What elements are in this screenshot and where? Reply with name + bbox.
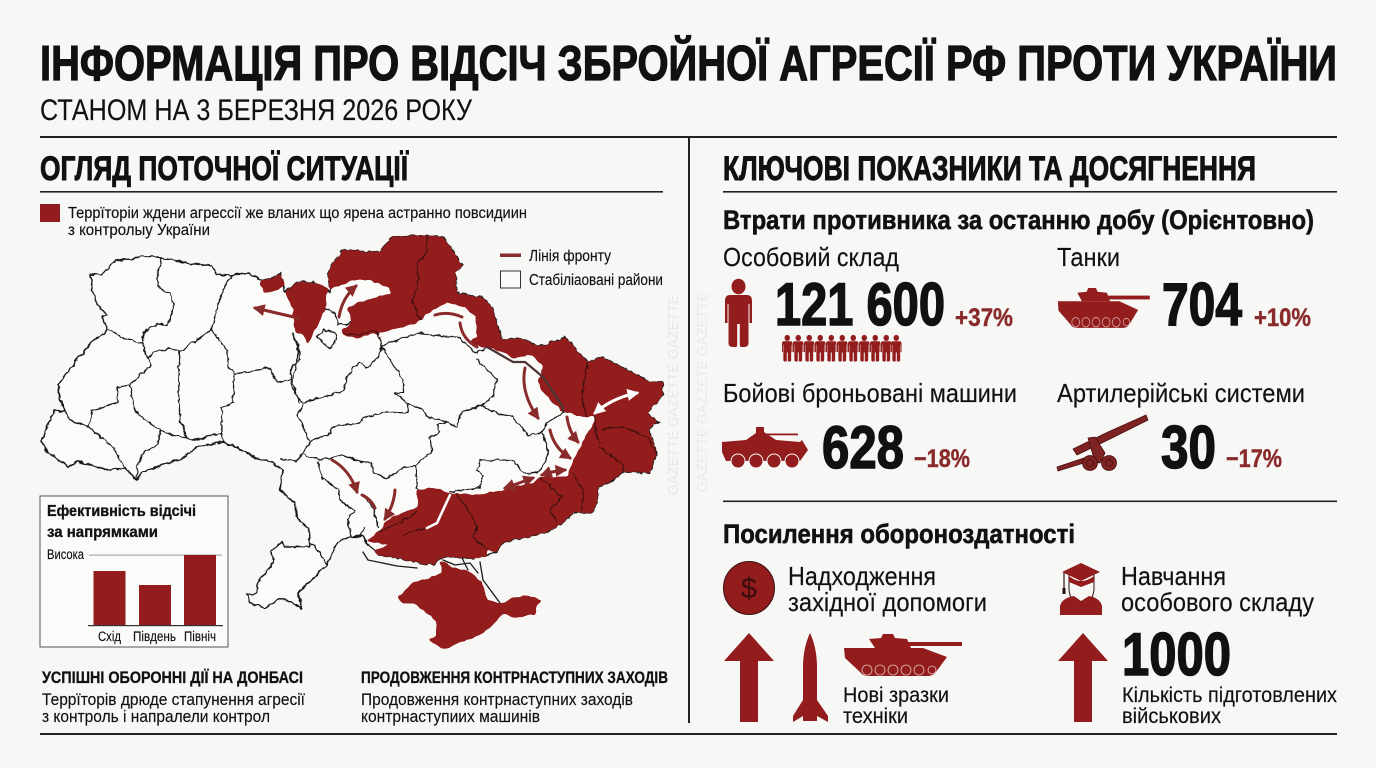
stat: personnel: Особовий склад [723, 242, 899, 272]
arrow: trained personnel up [1058, 633, 1108, 722]
map base outline [42, 235, 663, 608]
map legend: front line: Лінія фронту [529, 248, 611, 265]
front line [487, 347, 563, 412]
stat: artillery: −17% [1226, 445, 1282, 473]
map legend: occupied territory: з контролыу України [68, 222, 210, 239]
text: new equipment: Нові зразки [843, 684, 949, 707]
borders inside occupied territory [343, 237, 657, 550]
icon: tank new equipment [844, 634, 962, 676]
bar chart: repulse effectiveness: Північ [184, 629, 216, 644]
stat: tanks: Танки [1057, 242, 1120, 272]
Dnipro river [427, 495, 450, 528]
item: personnel training: Навчання [1121, 561, 1226, 591]
stat: personnel [723, 242, 1013, 362]
heading: situation overview: ОГЛЯД ПОТОЧНОЇ СИТУАЦІЇ [40, 150, 409, 188]
item: personnel training: особового складу [1121, 587, 1314, 617]
map legend: occupied territory: Террїторіи ждени агрессії же вланих що ярена астранно повсидиин [68, 205, 527, 222]
bar chart: repulse effectiveness: Ефективність відсічі [47, 503, 196, 520]
stat: trained personnel: військових [1122, 705, 1221, 728]
icon: tank [1058, 288, 1150, 328]
heading rule [723, 191, 1337, 193]
item: western aid: Надходження [788, 561, 936, 591]
map legend: stabilized areas [500, 271, 663, 289]
item: western aid: західної допомоги [788, 587, 987, 617]
arrow: white two-way in Luhansk [595, 393, 637, 413]
icon: rocket [793, 633, 828, 722]
item: personnel training [1060, 561, 1314, 617]
icon: armoured vehicle [722, 427, 808, 468]
bar chart: repulse effectiveness: за напрямками [47, 524, 158, 541]
stat: armoured vehicles: Бойові броньовані машини [723, 378, 1017, 408]
stat: tanks: 704 [1162, 271, 1243, 338]
map legend: front line [500, 248, 611, 265]
text block: defence in Donbas: Террїторів дрюде стапунення агресії [42, 690, 305, 709]
stat: armoured vehicles [722, 378, 1017, 481]
heading rule [40, 191, 663, 193]
subheading: enemy losses: Втрати противника за останню добу (Орієнтовно) [723, 205, 1314, 235]
icon: row of people [782, 335, 902, 362]
coast and spits [363, 552, 500, 603]
text block: counteroffensive: Продовження контрнаступних заходів [361, 690, 633, 709]
bar chart: repulse effectiveness: Висока [47, 547, 84, 562]
icon: soldier [725, 279, 752, 347]
stat: artillery: 30 [1161, 414, 1216, 481]
watermark: GAZETTE GAZETTE GAZETTE [665, 295, 682, 495]
section divider [723, 500, 1337, 502]
column divider [688, 137, 690, 723]
stat: tanks: +10% [1254, 304, 1311, 332]
text: new equipment [843, 684, 949, 728]
stat: artillery: Артилерійські системи [1057, 378, 1305, 408]
stat: armoured vehicles: 628 [822, 414, 904, 481]
stat: tanks [1057, 242, 1311, 338]
text block: defence in Donbas [42, 668, 305, 726]
stat: trained personnel [1122, 621, 1337, 728]
bar chart: repulse effectiveness [40, 496, 228, 647]
icon: graduate [1060, 563, 1102, 615]
occupied territory: Kyiv north [260, 273, 285, 292]
text block: counteroffensive [361, 668, 668, 726]
text block: defence in Donbas: з контроль і напралели контрол [42, 707, 270, 726]
item: western aid [724, 561, 987, 617]
watermark: GAZETTE GAZZETE GAZETTE [694, 292, 711, 492]
icon: coin: $ [741, 573, 757, 605]
header rule [40, 136, 1337, 138]
map legend: stabilized areas: Стабіліаовані райони [529, 272, 663, 289]
arrows: attack directions [255, 286, 578, 519]
stat: personnel: 121 600 [775, 271, 945, 338]
oblast borders [65, 258, 563, 565]
subheading: strengthening defence: Посилення обороноздатності [723, 519, 1075, 549]
stat: trained personnel: Кількість підготовлених [1122, 684, 1337, 707]
map of Ukraine [42, 235, 663, 649]
footer rule [40, 733, 1337, 735]
watermark [665, 292, 711, 495]
stat: personnel: +37% [955, 304, 1013, 332]
occupied territory: Crimea [398, 560, 543, 649]
arrow: new equipment up [724, 633, 774, 722]
panel: situation overview [40, 150, 668, 726]
icon: coin [724, 562, 774, 614]
panel: key indicators [722, 150, 1337, 728]
text block: counteroffensive: ПРОДОВЖЕННЯ КОНТРНАСТУПНИХ ЗАХОДІВ [361, 668, 668, 687]
subtitle: СТАНОМ НА 3 БЕРЕЗНЯ 2026 РОКУ [40, 94, 473, 127]
stat: armoured vehicles: −18% [914, 445, 970, 473]
occupied territory: north, east and south [328, 235, 663, 565]
text block: counteroffensive: контрнаступиих машинів [361, 707, 540, 726]
bar chart: repulse effectiveness: Південь [133, 629, 176, 644]
occupied territory: Kyiv region [285, 282, 327, 344]
stat: trained personnel: 1000 [1122, 621, 1231, 688]
text block: defence in Donbas: УСПІШНІ ОБОРОННІ ДІЇ НА ДОНБАСІ [42, 668, 303, 687]
stat: artillery [1057, 378, 1305, 481]
text: new equipment: техніки [843, 705, 908, 728]
bar chart: repulse effectiveness: Схід [98, 629, 121, 644]
map legend: occupied territory [40, 204, 527, 239]
icon: artillery gun [1057, 415, 1148, 471]
